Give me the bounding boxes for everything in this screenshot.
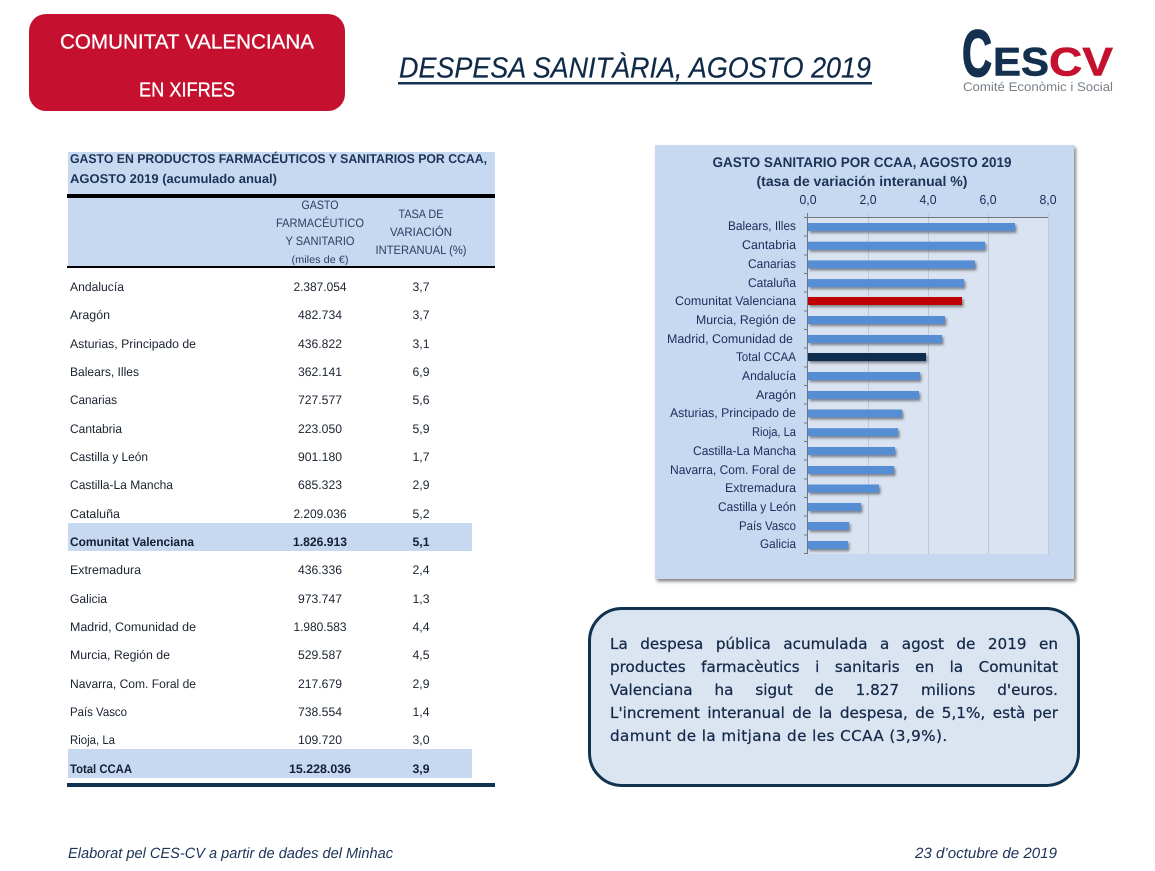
row: Rioja — [70, 733, 430, 747]
row: Rioja: 3,0 — [412, 733, 430, 747]
callout text: L'increment interanual de la despesa, de 5,1%, està per — [610, 704, 1058, 722]
axis labels: 8,0 — [1040, 192, 1056, 207]
row: País Vasco: 1,4 — [412, 705, 430, 719]
row: Murcia — [70, 648, 430, 662]
row: Extremadura: Extremadura — [70, 563, 141, 577]
row: Balears: 362.141 — [298, 365, 342, 379]
chart title: (tasa de variación interanual %) — [756, 173, 968, 189]
row: Comunitat Valenciana (highlight): Comunitat Valenciana — [70, 535, 194, 549]
row: Rioja: Rioja, La — [70, 733, 115, 747]
category labels: Murcia, Región de — [696, 313, 796, 327]
table heading: GASTO EN PRODUCTOS FARMACÉUTICOS Y SANITARIOS POR CCAA, — [70, 151, 487, 166]
category labels: País Vasco — [739, 519, 796, 533]
row: Asturias: Asturias, Principado de — [70, 337, 196, 351]
title: DESPESA SANITÀRIA, AGOSTO 2019 — [399, 52, 871, 84]
chart title — [712, 154, 1012, 189]
row: Murcia: Murcia, Región de — [70, 648, 170, 662]
row: Castilla-La Mancha — [70, 478, 430, 492]
row: Extremadura — [70, 563, 430, 577]
column header: tasa: VARIACIÓN — [390, 225, 452, 239]
axis labels: 6,0 — [980, 192, 996, 207]
row: Total CCAA (highlight): Total CCAA — [70, 762, 132, 776]
logo: CES-CV: ES — [993, 40, 1049, 84]
callout text — [610, 635, 1058, 745]
row: Madrid: Madrid, Comunidad de — [70, 620, 196, 634]
row: Murcia: 4,5 — [412, 648, 430, 662]
row: Madrid — [70, 620, 430, 634]
row: Aragón: 482.734 — [298, 308, 342, 322]
row: Asturias: 436.822 — [298, 337, 342, 351]
category labels: Castilla-La Mancha — [693, 444, 796, 458]
badge: Comunitat Valenciana en xifres: COMUNITAT VALENCIANA — [60, 32, 314, 54]
logo: CES-CV: CV — [1049, 40, 1113, 84]
column header: gasto — [276, 198, 364, 266]
badge: Comunitat Valenciana en xifres: EN XIFRES — [139, 80, 235, 102]
panel: bar chart — [655, 145, 1074, 579]
row: Castilla-La Mancha: 685.323 — [298, 478, 342, 492]
callout: summary text — [588, 607, 1080, 787]
logo: CES-CV: C — [962, 16, 992, 90]
row: Castilla y León — [70, 450, 430, 464]
row: Total CCAA (highlight): 15.228.036 — [289, 762, 351, 776]
callout text: productes farmacèutics i sanitaris en la Comunitat — [610, 658, 1058, 676]
axis labels: 2,0 — [860, 192, 876, 207]
row: Aragón — [70, 308, 430, 322]
row: Aragón: Aragón — [70, 308, 110, 322]
category labels: Rioja, La — [752, 425, 796, 439]
row: Canarias: 727.577 — [298, 393, 342, 407]
row: Castilla-La Mancha: 2,9 — [412, 478, 430, 492]
row: Canarias — [70, 393, 430, 407]
row: País Vasco: 738.554 — [298, 705, 342, 719]
column header: tasa — [376, 207, 466, 257]
plot area — [808, 217, 1048, 554]
row: Andalucía: 2.387.054 — [294, 280, 347, 294]
row: Canarias: Canarias — [70, 393, 117, 407]
row: Total CCAA (highlight): 3,9 — [412, 762, 430, 776]
row: Galicia: 1,3 — [412, 592, 430, 606]
category labels: Madrid, Comunidad de — [667, 332, 793, 346]
category labels: Balears, Illes — [728, 219, 796, 233]
row: Cantabria: 223.050 — [298, 422, 342, 436]
row: Galicia: Galicia — [70, 592, 107, 606]
row: Navarra: 2,9 — [412, 677, 430, 691]
row: Total CCAA (highlight) — [68, 749, 472, 778]
row: Navarra — [70, 677, 430, 691]
row: Canarias: 5,6 — [412, 393, 430, 407]
category labels: Castilla y León — [718, 500, 796, 514]
row: Castilla y León: 901.180 — [298, 450, 342, 464]
row: Cantabria: Cantabria — [70, 422, 122, 436]
category labels: Galicia — [760, 537, 796, 551]
category labels: Navarra, Com. Foral de — [670, 463, 796, 477]
row: País Vasco: País Vasco — [70, 705, 127, 719]
callout text: Valenciana ha sigut de 1.827 milions d'euros. — [610, 681, 1058, 699]
footer: source: Elaborat pel CES-CV a partir de dades del Minhac — [68, 846, 394, 862]
row: Comunitat Valenciana (highlight): 1.826.913 — [293, 535, 347, 549]
badge: Comunitat Valenciana en xifres — [29, 14, 345, 111]
row: Asturias — [70, 337, 430, 351]
row: Extremadura: 436.336 — [298, 563, 342, 577]
table heading — [67, 151, 495, 268]
row: Aragón: 3,7 — [412, 308, 430, 322]
row: Balears — [70, 365, 430, 379]
row: Comunitat Valenciana (highlight): 5,1 — [412, 535, 430, 549]
category labels: Asturias, Principado de — [670, 406, 796, 420]
row: Andalucía: Andalucía — [70, 280, 124, 294]
category labels: Aragón — [756, 388, 796, 402]
category labels: Andalucía — [742, 369, 796, 383]
row: Balears: 6,9 — [412, 365, 430, 379]
row: Comunitat Valenciana (highlight) — [68, 523, 472, 551]
category labels: Comunitat Valenciana — [675, 294, 796, 308]
row: Cataluña — [70, 507, 430, 521]
column header: gasto: GASTO — [302, 198, 338, 212]
row: Navarra: 217.679 — [298, 677, 342, 691]
category labels: Extremadura — [725, 481, 796, 495]
row: Extremadura: 2,4 — [412, 563, 430, 577]
category labels: Canarias — [748, 257, 796, 271]
panel: spending table — [67, 151, 495, 787]
table heading: AGOSTO 2019 (acumulado anual) — [70, 171, 277, 186]
row: Cataluña: 5,2 — [412, 507, 430, 521]
logo: CES-CV: Comité Econòmic i Social — [963, 80, 1113, 94]
category labels: Cantabria — [742, 238, 796, 252]
row: Andalucía — [70, 280, 430, 294]
row: Balears: Balears, Illes — [70, 365, 139, 379]
callout text: La despesa pública acumulada a agost de 2019 en — [610, 635, 1058, 653]
row: Galicia: 973.747 — [298, 592, 342, 606]
row: Cataluña: 2.209.036 — [294, 507, 347, 521]
column header: gasto: (miles de €) — [292, 254, 348, 266]
row: Castilla-La Mancha: Castilla-La Mancha — [70, 478, 173, 492]
axis labels — [800, 192, 1056, 207]
axis labels: 0,0 — [800, 192, 816, 207]
category labels — [667, 219, 797, 551]
logo: CES-CV — [962, 16, 1113, 94]
row: Galicia — [70, 592, 430, 606]
row: Navarra: Navarra, Com. Foral de — [70, 677, 196, 691]
row: Murcia: 529.587 — [298, 648, 342, 662]
row: Madrid: 1.980.583 — [294, 620, 347, 634]
column header: tasa: INTERANUAL (%) — [376, 243, 466, 257]
category labels: Total CCAA — [736, 350, 797, 364]
column header: gasto: FARMACÉUTICO — [276, 216, 364, 230]
column header: gasto: Y SANITARIO — [286, 234, 354, 248]
row: Madrid: 4,4 — [412, 620, 430, 634]
column header: tasa: TASA DE — [398, 207, 444, 221]
chart title: GASTO SANITARIO POR CCAA, AGOSTO 2019 — [712, 154, 1012, 170]
row: Cataluña: Cataluña — [70, 507, 120, 521]
row: Cantabria: 5,9 — [412, 422, 430, 436]
row: Cantabria — [70, 422, 430, 436]
row: Castilla y León: 1,7 — [412, 450, 430, 464]
row: Asturias: 3,1 — [412, 337, 430, 351]
row: Rioja: 109.720 — [298, 733, 342, 747]
axis labels: 4,0 — [920, 192, 936, 207]
row: Castilla y León: Castilla y León — [70, 450, 148, 464]
footer: date: 23 d’octubre de 2019 — [914, 846, 1057, 862]
bars — [808, 223, 1015, 549]
row: País Vasco — [70, 705, 430, 719]
callout text: damunt de la mitjana de les CCAA (3,9%). — [610, 727, 948, 745]
row: Andalucía: 3,7 — [412, 280, 430, 294]
category labels: Cataluña — [748, 276, 796, 290]
